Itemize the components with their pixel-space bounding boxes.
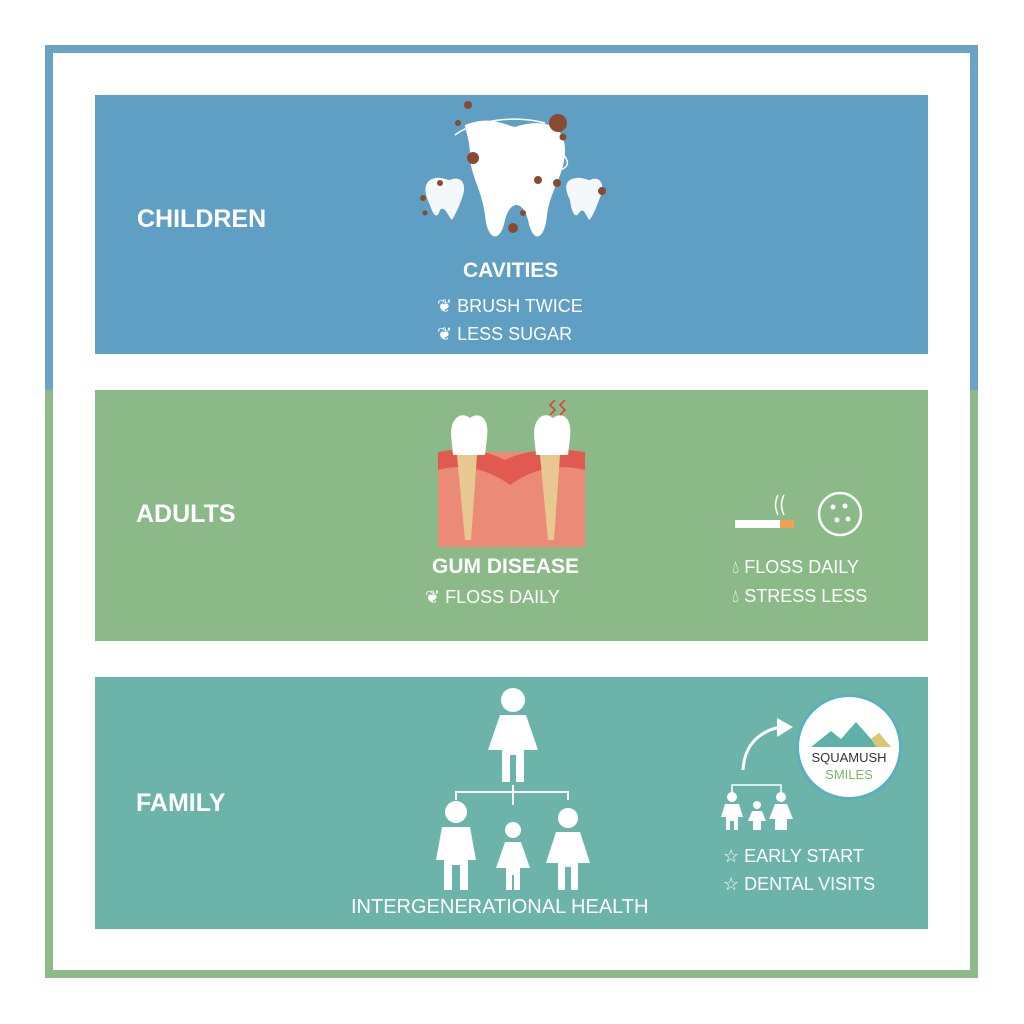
list: adult tips: 💧︎ FLOSS DAILY <box>732 557 859 577</box>
list: children tips <box>437 296 583 344</box>
panel: adults <box>95 390 928 641</box>
icon: gum disease <box>438 400 585 547</box>
list: adult tips <box>732 557 867 606</box>
text: floss daily: ❦ FLOSS DAILY <box>425 587 560 607</box>
icon: arrow <box>742 718 793 770</box>
panel: children <box>95 95 928 354</box>
icon: family tree <box>436 688 590 890</box>
list: adult tips: 💧︎ STRESS LESS <box>732 586 867 606</box>
list: children tips: ❦ LESS SUGAR <box>437 324 572 344</box>
icon: cigarette <box>735 494 794 528</box>
heading: family: FAMILY <box>136 789 225 817</box>
list: family tips: ☆ EARLY START <box>723 846 864 866</box>
icon: small family <box>721 784 793 830</box>
logo: squamush smiles: SQUAMUSH <box>811 750 887 765</box>
icon: teeth with bacteria <box>420 101 606 236</box>
text: intergenerational health: INTERGENERATIONAL HEALTH <box>351 896 648 918</box>
heading: adults: ADULTS <box>136 500 236 528</box>
logo: squamush smiles: SMILES <box>825 767 873 782</box>
list: family tips <box>723 846 875 894</box>
heading: cavities: CAVITIES <box>463 259 558 282</box>
heading: gum disease: GUM DISEASE <box>432 555 579 578</box>
panel: family <box>95 677 928 929</box>
list: children tips: ❦ BRUSH TWICE <box>437 296 583 316</box>
icon: bacteria bubble <box>818 492 862 536</box>
heading: children: CHILDREN <box>137 205 266 233</box>
list: family tips: ☆ DENTAL VISITS <box>723 874 875 894</box>
logo: squamush smiles <box>796 694 902 800</box>
